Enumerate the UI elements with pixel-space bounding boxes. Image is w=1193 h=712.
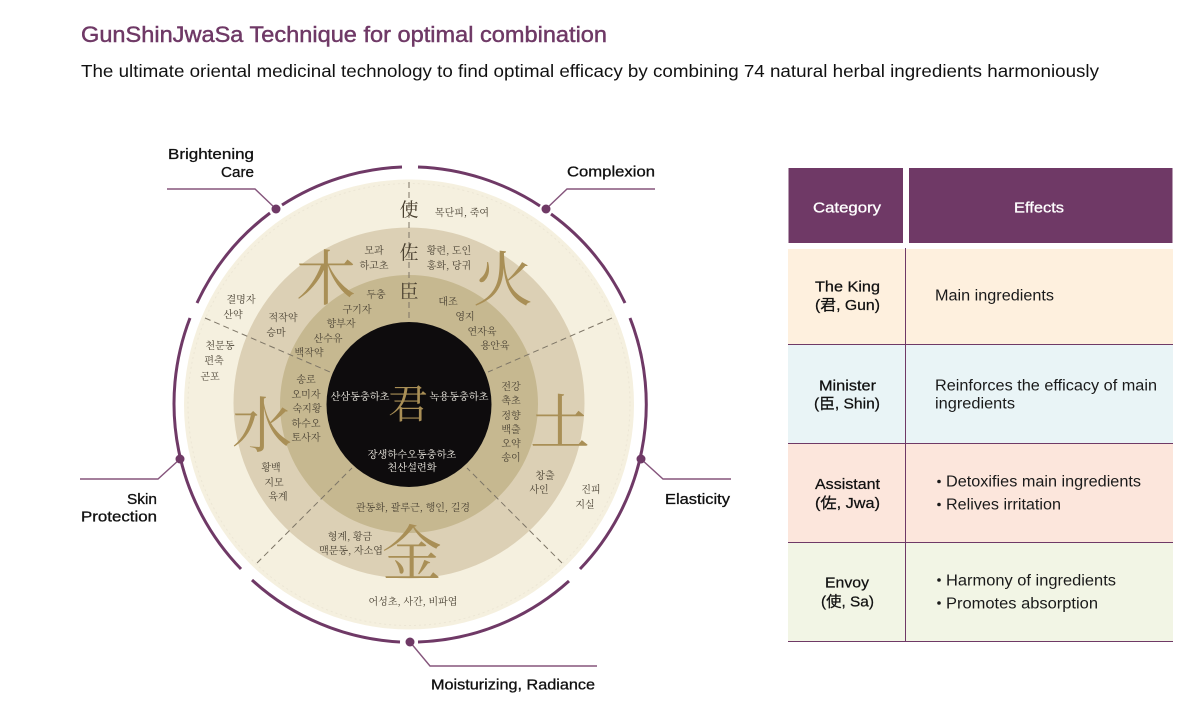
header: Effects: Effects — [1014, 200, 1064, 216]
row: Minister: ingredients — [935, 396, 1015, 412]
middle ring ingredient labels: 적작약 — [269, 309, 298, 324]
chart: five elements concentric circle diagram — [174, 167, 646, 642]
row: Minister: Minister — [819, 378, 876, 394]
row: Assistant: Relives irritation — [946, 496, 1061, 514]
callout: Complexion: Complexion — [567, 164, 655, 180]
row: Envoy: Promotes absorption — [946, 596, 1098, 612]
callout: Brightening Care — [167, 147, 280, 214]
middle ring ingredient labels: 홍화, 당귀 — [427, 257, 471, 272]
outer ring ingredient labels: 진피 — [581, 481, 601, 496]
five element characters: 土 — [530, 376, 590, 462]
core ingredient labels: 장생하수오동충하초 — [368, 446, 456, 461]
inner ring ingredient labels: 영지 — [455, 308, 475, 323]
inner ring ingredient labels: 연자육 — [468, 323, 497, 338]
five element characters: 火 — [473, 233, 533, 319]
outer ring ingredient labels: 지실 — [575, 496, 595, 511]
row: The King — [788, 249, 1173, 344]
inner ring ingredient labels: 정향 — [501, 407, 521, 422]
inner ring ingredient labels: 오미자 — [292, 386, 321, 401]
core ingredient labels: 녹용동충하초 — [429, 388, 489, 403]
row: Envoy: (使, Sa) — [821, 594, 874, 610]
outer ring ingredient labels — [200, 204, 601, 608]
subtitle: The ultimate oriental medicinal technology to find optimal efficacy by combining 74 natural herbal ingredients harmoniously — [81, 61, 1099, 81]
inner ring ingredient labels: 전강 — [501, 378, 521, 393]
callout: Elasticity: Elasticity — [665, 492, 731, 508]
five element characters: 木 — [296, 232, 356, 318]
inner ring ingredient labels: 산수유 — [314, 330, 343, 345]
row: Minister — [788, 345, 1173, 443]
inner ring ingredient labels: 관동화, 괄루근, 행인, 길경 — [356, 499, 470, 514]
middle ring ingredient labels: 황백 — [261, 459, 281, 474]
header: Effects — [909, 168, 1172, 243]
middle ring — [234, 228, 584, 578]
row: Assistant: (佐, Jwa) — [815, 495, 880, 512]
outer ring ingredient labels: 천문동 — [206, 337, 235, 352]
inner ring ingredient labels: 용안육 — [481, 337, 510, 352]
row: Minister: (臣, Shin) — [814, 396, 880, 412]
inner ring ingredient labels: 두충 — [366, 286, 386, 301]
inner ring ingredient labels: 구기자 — [343, 301, 372, 316]
outer cream ring — [184, 180, 634, 630]
inner ring ingredient labels — [292, 286, 521, 514]
inner ring — [280, 275, 538, 533]
callout: Moisturizing, Radiance: Moisturizing, Radiance — [431, 678, 595, 694]
outer ring ingredient labels: 어성초, 사간, 비파엽 — [369, 593, 457, 608]
row: Envoy: Harmony of ingredients — [946, 572, 1116, 590]
role characters on vertical axis — [399, 195, 419, 304]
core ingredient labels: 천산설련화 — [387, 459, 437, 474]
middle ring ingredient labels: 사인 — [529, 481, 549, 496]
middle ring ingredient labels: 하고초 — [360, 257, 389, 272]
inner ring ingredient labels: 백출 — [501, 421, 521, 436]
black core — [326, 322, 492, 487]
inner ring ingredient labels: 대조 — [438, 293, 458, 308]
row: Minister: Reinforces the efficacy of main — [935, 378, 1157, 394]
callout: Skin Protection: Protection — [81, 510, 157, 526]
role characters on vertical axis: 臣 — [399, 277, 419, 304]
inner ring ingredient labels: 숙지황 — [293, 400, 322, 415]
inner ring ingredient labels: 송로 — [296, 371, 316, 386]
inner ring ingredient labels: 송이 — [501, 449, 521, 464]
row: The King: The King — [815, 278, 880, 296]
outer ring ingredient labels: 산약 — [223, 306, 243, 321]
outer ring ingredient labels: 목단피, 죽여 — [435, 204, 489, 219]
role characters on vertical axis: 使 — [399, 195, 419, 222]
five element characters — [232, 232, 590, 593]
callout: Skin Protection — [80, 454, 184, 526]
callout: Brightening Care: Brightening — [168, 147, 254, 163]
king character: 君 — [388, 373, 428, 430]
outer segmented arc — [174, 167, 646, 642]
title: GunShinJwaSa Technique for optimal combination — [81, 22, 607, 47]
middle ring ingredient labels: 황련, 도인 — [427, 242, 471, 257]
middle ring ingredient labels: 지모 — [264, 474, 284, 489]
inner ring ingredient labels: 백작약 — [295, 344, 324, 359]
five element characters: 金 — [382, 507, 442, 593]
middle ring ingredient labels — [261, 242, 555, 557]
row: The King: (君, Gun) — [815, 297, 880, 314]
row: Assistant — [788, 444, 1173, 542]
table: category and effects — [788, 168, 1173, 642]
middle ring ingredient labels: 모과 — [364, 242, 384, 257]
middle ring ingredient labels: 승마 — [266, 324, 286, 339]
middle ring ingredient labels: 맥문동, 자소엽 — [319, 542, 383, 557]
row: Assistant: Detoxifies main ingredients — [946, 474, 1141, 490]
outer ring ingredient labels: 편축 — [204, 352, 224, 367]
inner ring ingredient labels: 토사자 — [292, 429, 321, 444]
middle ring ingredient labels: 육계 — [268, 488, 288, 503]
callout: Complexion — [542, 164, 655, 214]
inner ring ingredient labels: 오약 — [501, 435, 521, 450]
row: The King: Main ingredients — [935, 288, 1054, 304]
middle ring ingredient labels: 형계, 황금 — [328, 528, 373, 543]
dashed sector dividers — [205, 182, 612, 563]
five element characters: 水 — [232, 379, 292, 465]
callout: Brightening Care: Care — [221, 165, 254, 181]
middle ring ingredient labels: 창출 — [535, 467, 555, 482]
callout: Elasticity — [636, 454, 731, 508]
row: Assistant: Assistant — [815, 476, 881, 493]
core ingredient labels: 산삼동충하초 — [330, 388, 390, 403]
inner ring ingredient labels: 향부자 — [327, 315, 356, 330]
row: Envoy — [788, 543, 1173, 641]
outer ring ingredient labels: 곤포 — [200, 368, 220, 383]
header: Category: Category — [813, 200, 882, 216]
core ingredient labels — [330, 388, 489, 474]
role characters on vertical axis: 佐 — [399, 238, 419, 265]
callout: Skin Protection: Skin — [127, 492, 157, 508]
inner ring ingredient labels: 촉초 — [501, 392, 521, 407]
row: Envoy: Envoy — [825, 574, 870, 592]
inner ring ingredient labels: 하수오 — [292, 415, 321, 430]
header: Category — [788, 168, 903, 243]
outer ring ingredient labels: 결명자 — [227, 291, 256, 306]
callout: Moisturizing, Radiance — [406, 638, 597, 694]
